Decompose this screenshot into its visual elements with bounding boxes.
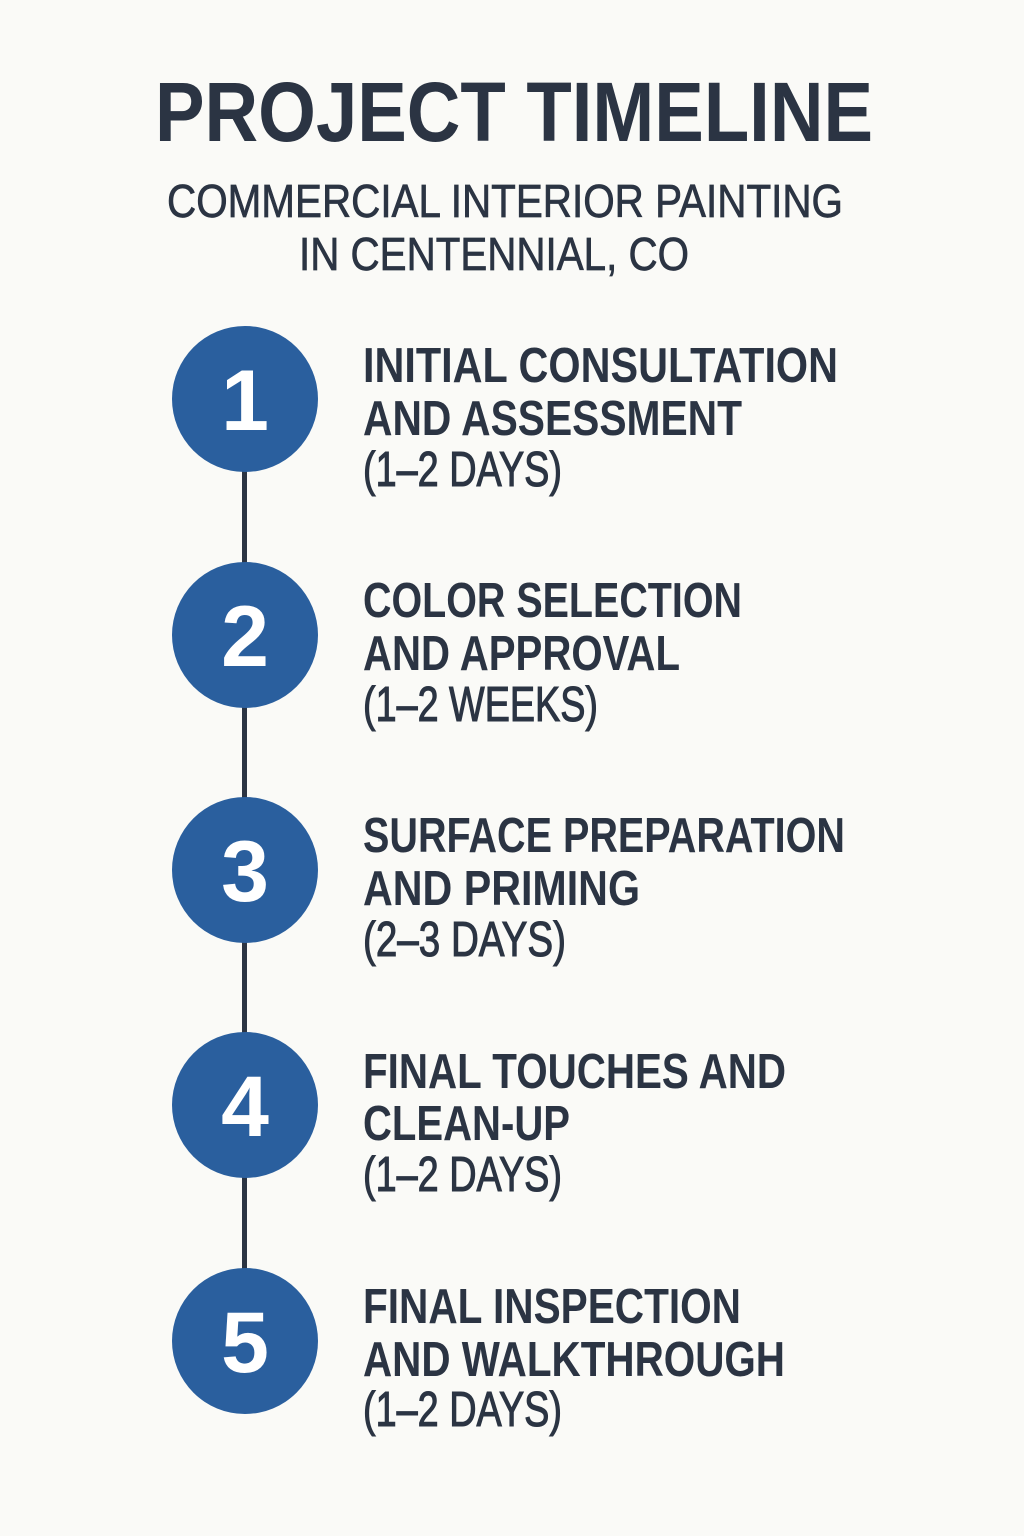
step 4 text xyxy=(363,1045,786,1202)
step 4 text: CLEAN-UP xyxy=(363,1097,570,1151)
step 3 text: AND PRIMING xyxy=(363,862,640,916)
step 5 xyxy=(172,1268,785,1437)
step 4 text: FINAL TOUCHES AND xyxy=(363,1045,786,1099)
step 3 text: SURFACE PREPARATION xyxy=(363,809,845,863)
timeline connector line xyxy=(242,399,247,1341)
step 4 circle: 4 xyxy=(221,1059,269,1155)
step 2 text xyxy=(363,574,742,732)
step 1 text xyxy=(363,339,838,497)
subtitle: IN CENTENNIAL, CO xyxy=(299,228,689,280)
step 5 circle xyxy=(172,1268,318,1414)
step 3 circle xyxy=(172,797,318,943)
step 4 text: (1–2 DAYS) xyxy=(363,1148,562,1202)
step 5 text: AND WALKTHROUGH xyxy=(363,1333,785,1387)
step 3 text xyxy=(363,809,845,967)
step 1 text: INITIAL CONSULTATION xyxy=(363,339,838,393)
step 1 xyxy=(172,326,838,497)
subtitle xyxy=(167,175,843,280)
step 1 circle: 1 xyxy=(221,353,269,449)
step 2 text: (1–2 WEEKS) xyxy=(363,678,598,732)
step 2 xyxy=(172,562,742,732)
step 2 circle: 2 xyxy=(221,589,269,685)
step 2 text: COLOR SELECTION xyxy=(363,574,742,628)
step 2 text: AND APPROVAL xyxy=(363,627,680,681)
step 5 circle: 5 xyxy=(221,1295,269,1391)
step 3 circle: 3 xyxy=(221,824,269,920)
step 5 text: (1–2 DAYS) xyxy=(363,1383,562,1437)
step 3 xyxy=(172,797,845,967)
step 1 circle xyxy=(172,326,318,472)
subtitle: COMMERCIAL INTERIOR PAINTING xyxy=(167,175,843,227)
step 3 text: (2–3 DAYS) xyxy=(363,913,566,967)
step 1 text: (1–2 DAYS) xyxy=(363,443,562,497)
step 4 xyxy=(172,1032,786,1202)
step 5 text xyxy=(363,1280,785,1437)
step 4 circle xyxy=(172,1032,318,1178)
step 5 text: FINAL INSPECTION xyxy=(363,1280,741,1334)
title: PROJECT TIMELINE xyxy=(155,65,873,159)
step 2 circle xyxy=(172,562,318,708)
step 1 text: AND ASSESSMENT xyxy=(363,392,742,446)
